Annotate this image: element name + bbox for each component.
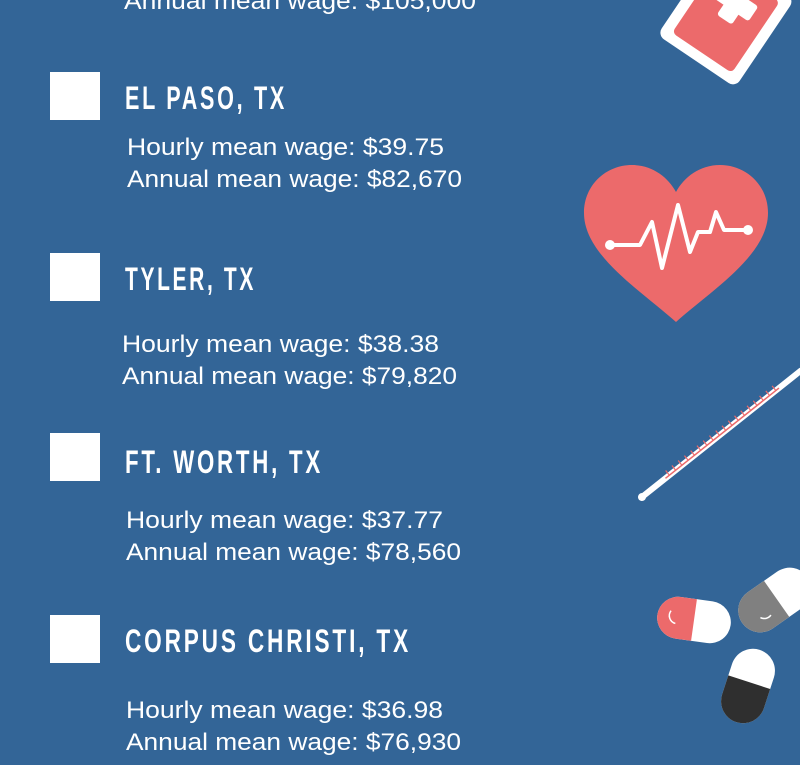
icon: thermometer xyxy=(635,364,800,503)
checkbox xyxy=(50,433,100,481)
section: Tyler: Annual mean wage: $79,820 xyxy=(122,363,457,390)
wage text: Hourly mean wage: $39.75 xyxy=(127,134,444,161)
heading: EL PASO, TX xyxy=(125,80,287,116)
checkbox xyxy=(50,72,100,120)
checkbox xyxy=(50,253,100,301)
section: Ft. Worth xyxy=(50,433,461,566)
heading: TYLER, TX xyxy=(125,261,256,297)
heading: FT. WORTH, TX xyxy=(125,444,323,480)
section: Corpus Christi: Annual mean wage: $76,930 xyxy=(126,729,461,756)
wage text: Hourly mean wage: $38.38 xyxy=(122,331,439,358)
checkbox xyxy=(50,615,100,663)
section: El Paso xyxy=(50,72,462,193)
wage text: Hourly mean wage: $37.77 xyxy=(126,507,443,534)
icon: pills xyxy=(654,559,800,729)
wage text: Hourly mean wage: $36.98 xyxy=(126,697,443,724)
section: Tyler xyxy=(50,253,457,390)
section: Ft. Worth: Annual mean wage: $78,560 xyxy=(126,539,461,566)
icon: heart with pulse xyxy=(584,165,768,322)
section: El Paso: Annual mean wage: $82,670 xyxy=(127,166,462,193)
heading: CORPUS CHRISTI, TX xyxy=(125,623,411,659)
section: Corpus Christi xyxy=(50,615,461,756)
icon: first aid kit xyxy=(657,0,795,87)
